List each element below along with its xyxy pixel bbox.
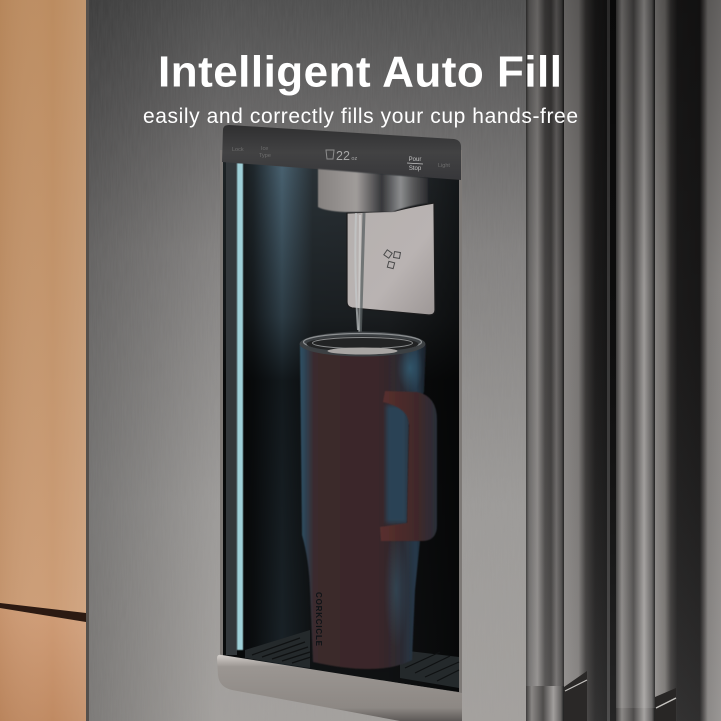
icon: ice cubes (384, 250, 400, 269)
wood cabinet (0, 0, 88, 721)
control panel (222, 125, 461, 180)
door handle left (526, 0, 587, 721)
tumbler rim (300, 332, 426, 356)
water stream (355, 213, 364, 345)
dispenser cavity (220, 150, 462, 695)
drip tray grate (252, 638, 459, 681)
panel labels: Ice (261, 146, 268, 152)
brand name: CORKCICLE (314, 592, 323, 647)
panel labels (232, 146, 450, 169)
door handle right (616, 0, 676, 721)
pour stop label (407, 157, 423, 172)
icon: cup (326, 150, 334, 159)
panel labels: Lock (232, 147, 244, 153)
title: Intelligent Auto Fill (158, 48, 562, 96)
tumbler body (300, 345, 426, 669)
stainless door (86, 0, 528, 721)
dispenser paddle (347, 203, 435, 315)
panel labels: Light (438, 163, 450, 169)
water spout (318, 169, 428, 212)
panel labels: Type (259, 153, 271, 159)
right door and handle recesses (564, 0, 721, 721)
ounces readout: 22 oz (336, 149, 357, 163)
tumbler (300, 332, 437, 669)
pour stop label: Stop (409, 166, 422, 172)
tumbler handle (380, 391, 437, 541)
subtitle: easily and correctly fills your cup hands-free (143, 105, 578, 128)
pour stop label: Pour (409, 157, 421, 163)
drip tray (217, 655, 462, 721)
